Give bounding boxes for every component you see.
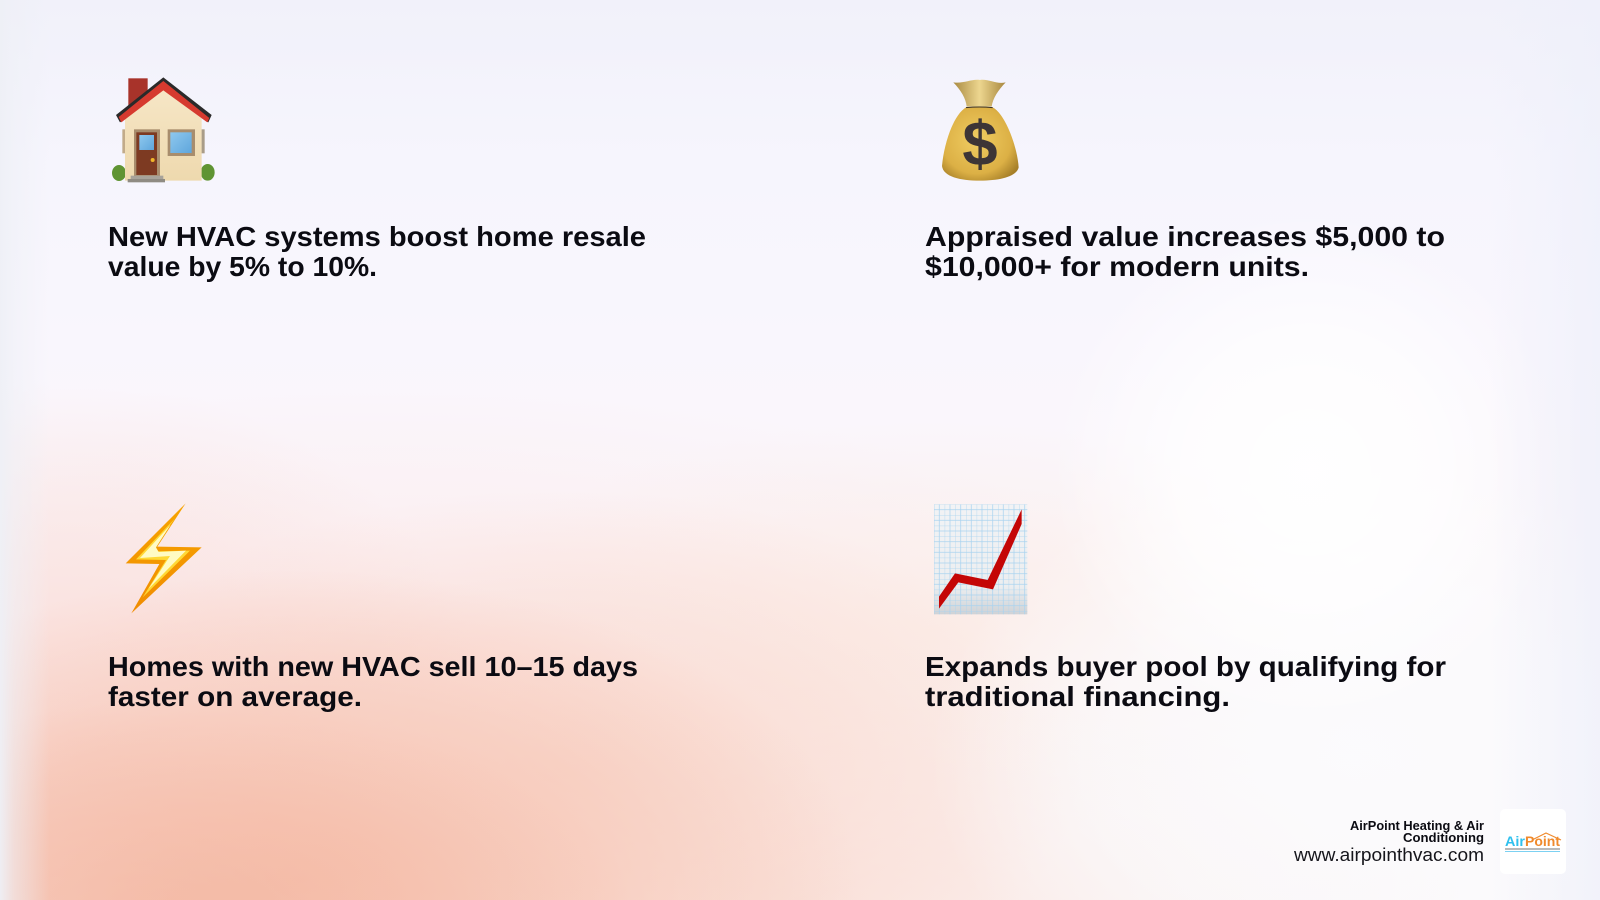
- text: appraised value: Appraised value increases $5,000 to: [925, 221, 1445, 252]
- icon: chart increasing: [934, 504, 1027, 614]
- footer: company branding: [1293, 809, 1566, 874]
- company name: AirPoint Heating & Air: [1350, 818, 1484, 833]
- icon: money bag: $: [962, 110, 998, 180]
- item: appraised value: [925, 80, 1445, 282]
- logo card: Air: [1505, 833, 1526, 849]
- icon: lightning bolt: [126, 503, 202, 613]
- text: resale value: value by 5% to 10%.: [108, 251, 377, 282]
- company name: Conditioning: [1403, 830, 1484, 845]
- text: resale value: New HVAC systems boost home resale: [108, 221, 646, 252]
- text: faster sale: Homes with new HVAC sell 10–15 days: [108, 651, 638, 682]
- text: buyer pool: Expands buyer pool by qualifying for: [925, 651, 1446, 682]
- text: faster sale: faster on average.: [108, 681, 362, 712]
- logo card: Point: [1525, 833, 1560, 849]
- text: appraised value: $10,000+ for modern units.: [925, 251, 1309, 282]
- website: www.airpointhvac.com: [1293, 845, 1484, 865]
- icon: money bag: [942, 80, 1019, 181]
- item: faster sale: [108, 503, 638, 712]
- logo card: [1500, 809, 1566, 874]
- item: buyer pool: [925, 504, 1446, 712]
- item: home resale value: [108, 77, 646, 282]
- icon: house: [112, 77, 215, 182]
- text: buyer pool: traditional financing.: [925, 681, 1230, 712]
